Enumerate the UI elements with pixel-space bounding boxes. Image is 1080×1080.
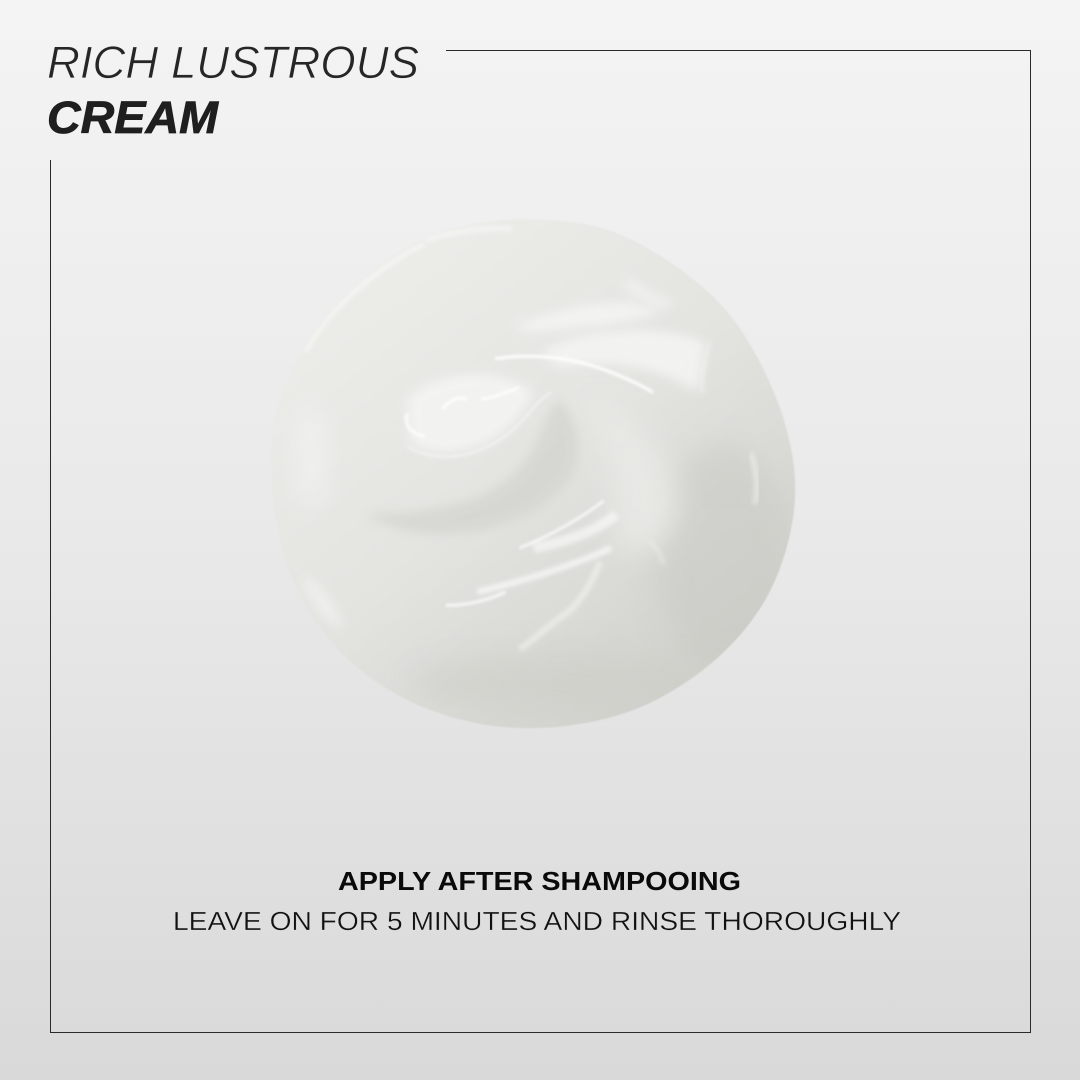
cream swatch base shape: [270, 219, 795, 728]
cream swatch: [332, 220, 796, 728]
title: CREAM: [47, 92, 220, 143]
instructions: APPLY AFTER SHAMPOOING: [338, 866, 741, 896]
title: RICH LUSTROUS: [47, 37, 419, 88]
title: [47, 37, 419, 143]
cream swatch shading and highlights: [312, 294, 778, 678]
instructions: [173, 866, 901, 936]
instructions: LEAVE ON FOR 5 MINUTES AND RINSE THOROUGHLY: [173, 906, 901, 936]
